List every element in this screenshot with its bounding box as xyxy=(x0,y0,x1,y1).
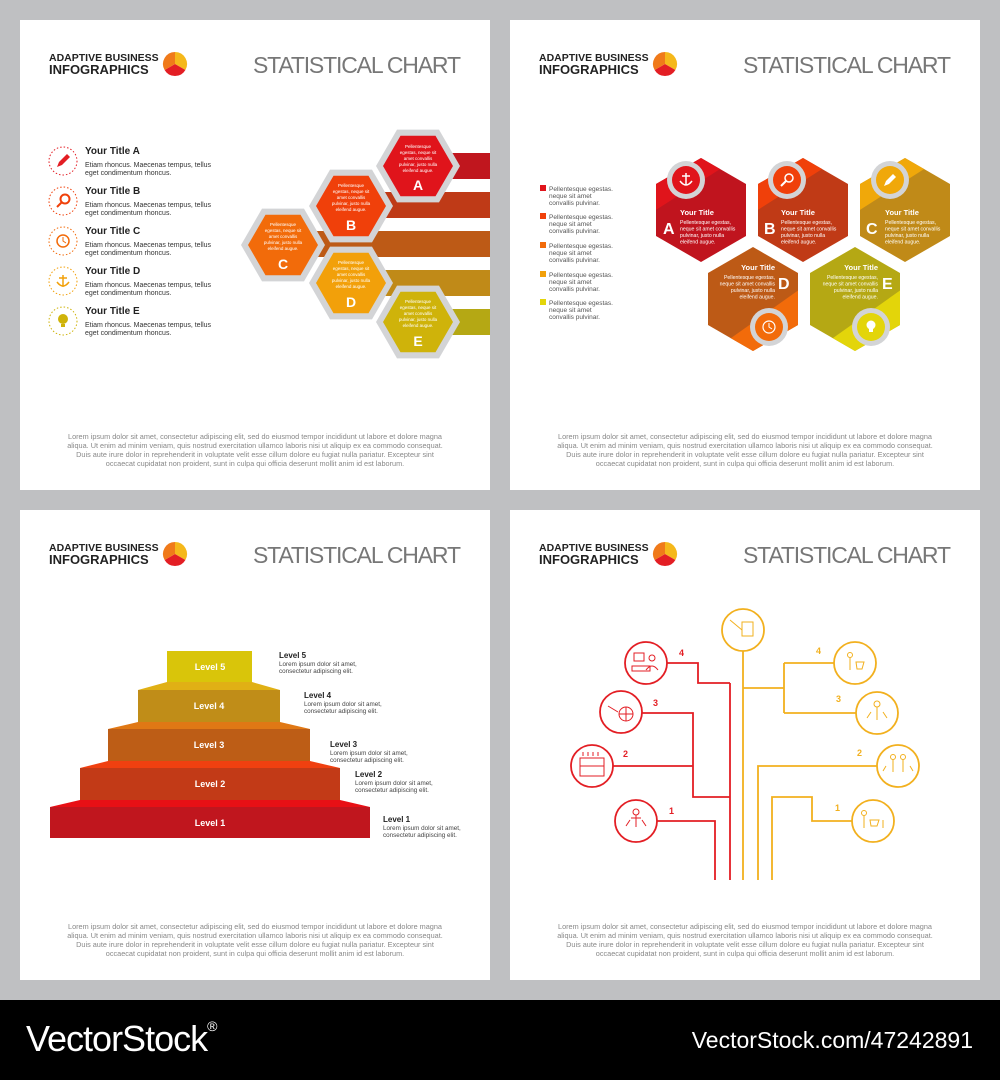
legend: neque sit amet xyxy=(549,279,592,286)
legend: convallis pulvinar. xyxy=(549,286,600,293)
hexagons A-E: eleifend augue. xyxy=(336,284,366,289)
hexagons A-E: C xyxy=(278,256,288,272)
red numbers: 2 xyxy=(623,749,628,759)
image id: VectorStock.com/47242891 xyxy=(692,1027,973,1053)
level labels xyxy=(279,651,461,839)
level labels: Level 2 xyxy=(355,770,383,779)
hexagons: E xyxy=(882,276,893,293)
level labels: Level 3 xyxy=(330,740,358,749)
level labels: Level 4 xyxy=(304,691,332,700)
legend: Pellentesque egestas. xyxy=(549,272,613,279)
footer text: Lorem ipsum dolor sit amet, consectetur adipiscing elit, sed do eiusmod tempor incididunt ut labore et dolore magna xyxy=(558,922,933,931)
footer text: aliqua. Ut enim ad minim veniam, quis nostrud exercitation ullamco laboris nisi ut aliquip ex ea commodo consequat. xyxy=(67,441,443,450)
legend: convallis pulvinar. xyxy=(549,228,600,235)
hexagons A-E: egestas, neque sit xyxy=(333,189,370,194)
hexagons: pulvinar, justo nulla xyxy=(834,288,878,294)
pyramid: Level 2 xyxy=(195,779,225,789)
hexagons: neque sit amet convallis xyxy=(885,226,941,232)
header: ADAPTIVE BUSINESS xyxy=(49,542,159,554)
legend: Pellentesque egestas. xyxy=(549,214,613,221)
hexagons: Pellentesque egestas, xyxy=(724,275,775,281)
level labels: Lorem ipsum dolor sit amet, xyxy=(330,750,408,757)
hexagons: Your Title xyxy=(844,263,878,272)
hexagons A-E: eleifend augue. xyxy=(336,207,366,212)
legend: neque sit amet xyxy=(549,250,592,257)
footer text: occaecat cupidatat non proident, sunt in culpa qui officia deserunt mollit anim id est laborum. xyxy=(596,949,894,958)
header: ADAPTIVE BUSINESS xyxy=(49,52,159,64)
legend: Pellentesque egestas. xyxy=(549,243,613,250)
header: ADAPTIVE BUSINESS xyxy=(539,542,649,554)
level labels: Lorem ipsum dolor sit amet, xyxy=(304,701,382,708)
hexagons A-E: amet convallis xyxy=(337,272,366,277)
legend xyxy=(540,185,613,321)
hexagons A-E: egestas, neque sit xyxy=(333,266,370,271)
hexagons A-E: Pellentesque xyxy=(338,260,365,265)
level labels: consectetur adipiscing elit. xyxy=(355,787,429,794)
hexagons: eleifend augue. xyxy=(781,240,816,246)
header: INFOGRAPHICS xyxy=(539,552,639,567)
hexagons A-E: amet convallis xyxy=(269,234,298,239)
bars xyxy=(283,153,490,335)
hexagons: eleifend augue. xyxy=(843,294,878,300)
footer text xyxy=(557,432,933,468)
hexagons A-E: pulvinar, justo nulla xyxy=(332,201,371,206)
hexagons A-E: pulvinar, justo nulla xyxy=(399,317,438,322)
hexagons A-E: pulvinar, justo nulla xyxy=(399,162,438,167)
level labels: Level 1 xyxy=(383,815,411,824)
list items: Etiam rhoncus. Maecenas tempus, tellus xyxy=(85,322,212,329)
footer text xyxy=(557,922,933,958)
footer text: Duis aute irure dolor in reprehenderit in voluptate velit esse cillum dolore eu fugiat nulla pariatur. Excepteur sint xyxy=(76,940,434,949)
list items: Your Title B xyxy=(85,186,140,197)
legend: convallis pulvinar. xyxy=(549,200,600,207)
header xyxy=(49,542,461,568)
footer text: Duis aute irure dolor in reprehenderit in voluptate velit esse cillum dolore eu fugiat nulla pariatur. Excepteur sint xyxy=(566,450,924,459)
panel: tree diagram xyxy=(510,510,980,980)
hexagons: Pellentesque egestas, xyxy=(827,275,878,281)
hexagons A-E: amet convallis xyxy=(404,156,433,161)
level labels: consectetur adipiscing elit. xyxy=(279,668,353,675)
footer text: Duis aute irure dolor in reprehenderit in voluptate velit esse cillum dolore eu fugiat nulla pariatur. Excepteur sint xyxy=(566,940,924,949)
hexagons A-E: pulvinar, justo nulla xyxy=(264,240,303,245)
red numbers xyxy=(623,648,684,816)
hexagons: eleifend augue. xyxy=(740,294,775,300)
list items: Your Title C xyxy=(85,226,140,237)
hexagons A-E: E xyxy=(413,333,423,349)
header: STATISTICAL CHART xyxy=(253,52,461,78)
header xyxy=(539,542,951,568)
hexagons: pulvinar, justo nulla xyxy=(680,233,724,239)
hexagons A-E: A xyxy=(413,177,423,193)
list items: eget condimentum rhoncus. xyxy=(85,250,171,257)
footer text: Lorem ipsum dolor sit amet, consectetur adipiscing elit, sed do eiusmod tempor incididunt ut labore et dolore magna xyxy=(558,432,933,441)
pyramid: Level 1 xyxy=(195,818,225,828)
hexagons A-E: B xyxy=(346,217,356,233)
hexagons: A xyxy=(663,221,675,238)
header: STATISTICAL CHART xyxy=(743,542,951,568)
footer text: occaecat cupidatat non proident, sunt in culpa qui officia deserunt mollit anim id est laborum. xyxy=(106,949,404,958)
hexagons: pulvinar, justo nulla xyxy=(885,233,929,239)
hexagons A-E: pulvinar, justo nulla xyxy=(332,278,371,283)
hexagons: pulvinar, justo nulla xyxy=(731,288,775,294)
hexagons: neque sit amet convallis xyxy=(720,282,775,288)
list items: Etiam rhoncus. Maecenas tempus, tellus xyxy=(85,202,212,209)
list items: Your Title A xyxy=(85,146,140,157)
hexagons A-E: Pellentesque xyxy=(270,222,297,227)
brand name: VectorStock® xyxy=(26,1018,216,1059)
level labels: Lorem ipsum dolor sit amet, xyxy=(279,661,357,668)
hexagons: Pellentesque egestas, xyxy=(885,220,936,226)
hexagons: pulvinar, justo nulla xyxy=(781,233,825,239)
list items: eget condimentum rhoncus. xyxy=(85,210,171,217)
pyramid: Level 3 xyxy=(194,740,224,750)
list items: Your Title E xyxy=(85,306,140,317)
legend: Pellentesque egestas. xyxy=(549,300,613,307)
footer text: aliqua. Ut enim ad minim veniam, quis nostrud exercitation ullamco laboris nisi ut aliquip ex ea commodo consequat. xyxy=(557,931,933,940)
hexagons: Pellentesque egestas, xyxy=(781,220,832,226)
yellow numbers: 1 xyxy=(835,803,840,813)
hexagons: eleifend augue. xyxy=(885,240,920,246)
hexagons A-E: D xyxy=(346,294,356,310)
hexagons: eleifend augue. xyxy=(680,240,715,246)
red numbers: 4 xyxy=(679,648,684,658)
red numbers: 3 xyxy=(653,698,658,708)
footer text: Lorem ipsum dolor sit amet, consectetur adipiscing elit, sed do eiusmod tempor incididunt ut labore et dolore magna xyxy=(68,432,443,441)
legend: convallis pulvinar. xyxy=(549,257,600,264)
hexagons: C xyxy=(866,221,878,238)
list items: Etiam rhoncus. Maecenas tempus, tellus xyxy=(85,242,212,249)
yellow numbers xyxy=(816,646,862,813)
header: INFOGRAPHICS xyxy=(49,552,149,567)
red branches xyxy=(571,642,730,880)
list items: eget condimentum rhoncus. xyxy=(85,330,171,337)
header: STATISTICAL CHART xyxy=(253,542,461,568)
hexagons xyxy=(656,158,950,351)
hexagons: B xyxy=(764,221,776,238)
hexagons A-E: egestas, neque sit xyxy=(400,150,437,155)
hexagons A-E: egestas, neque sit xyxy=(400,305,437,310)
panel: honeycomb chart xyxy=(510,20,980,490)
header xyxy=(49,52,461,78)
header xyxy=(539,52,951,78)
yellow numbers: 4 xyxy=(816,646,821,656)
yellow numbers: 2 xyxy=(857,748,862,758)
footer text: occaecat cupidatat non proident, sunt in culpa qui officia deserunt mollit anim id est laborum. xyxy=(596,459,894,468)
pyramid: Level 4 xyxy=(194,701,224,711)
list items: Etiam rhoncus. Maecenas tempus, tellus xyxy=(85,162,212,169)
panel: pyramid levels xyxy=(20,510,490,980)
pyramid xyxy=(50,651,370,838)
hexagons: Pellentesque egestas, xyxy=(680,220,731,226)
header: STATISTICAL CHART xyxy=(743,52,951,78)
hexagons A-E: amet convallis xyxy=(337,195,366,200)
pyramid: Level 5 xyxy=(195,662,225,672)
watermark bar xyxy=(0,1000,1000,1080)
legend: neque sit amet xyxy=(549,221,592,228)
panel: hexagon list chart xyxy=(20,20,490,490)
yellow branches xyxy=(722,609,919,880)
hexagons A-E: egestas, neque sit xyxy=(265,228,302,233)
hexagons: Your Title xyxy=(885,208,919,217)
hexagons: Your Title xyxy=(680,208,714,217)
list items: eget condimentum rhoncus. xyxy=(85,170,171,177)
red numbers: 1 xyxy=(669,806,674,816)
legend: convallis pulvinar. xyxy=(549,314,600,321)
hexagons: neque sit amet convallis xyxy=(680,226,736,232)
footer text: aliqua. Ut enim ad minim veniam, quis nostrud exercitation ullamco laboris nisi ut aliquip ex ea commodo consequat. xyxy=(67,931,443,940)
level labels: Level 5 xyxy=(279,651,307,660)
hexagons A-E: Pellentesque xyxy=(338,183,365,188)
hexagons A-E: Pellentesque xyxy=(405,144,432,149)
list items: eget condimentum rhoncus. xyxy=(85,290,171,297)
footer text xyxy=(67,922,443,958)
hexagons: neque sit amet convallis xyxy=(781,226,837,232)
level labels: consectetur adipiscing elit. xyxy=(330,757,404,764)
hexagons A-E: Pellentesque xyxy=(405,299,432,304)
hexagons A-E xyxy=(241,130,460,358)
header: ADAPTIVE BUSINESS xyxy=(539,52,649,64)
list items xyxy=(49,146,212,337)
list items: Your Title D xyxy=(85,266,140,277)
legend: Pellentesque egestas. xyxy=(549,186,613,193)
hexagons A-E: eleifend augue. xyxy=(403,323,433,328)
level labels: consectetur adipiscing elit. xyxy=(383,832,457,839)
level labels: consectetur adipiscing elit. xyxy=(304,708,378,715)
footer text: Duis aute irure dolor in reprehenderit in voluptate velit esse cillum dolore eu fugiat nulla pariatur. Excepteur sint xyxy=(76,450,434,459)
footer text: Lorem ipsum dolor sit amet, consectetur adipiscing elit, sed do eiusmod tempor incididunt ut labore et dolore magna xyxy=(68,922,443,931)
footer text: occaecat cupidatat non proident, sunt in culpa qui officia deserunt mollit anim id est laborum. xyxy=(106,459,404,468)
hexagons A-E: amet convallis xyxy=(404,311,433,316)
header: INFOGRAPHICS xyxy=(539,62,639,77)
hexagons: Your Title xyxy=(741,263,775,272)
list items: Etiam rhoncus. Maecenas tempus, tellus xyxy=(85,282,212,289)
legend: neque sit amet xyxy=(549,307,592,314)
hexagons: neque sit amet convallis xyxy=(823,282,878,288)
hexagons: D xyxy=(778,276,790,293)
level labels: Lorem ipsum dolor sit amet, xyxy=(355,780,433,787)
level labels: Lorem ipsum dolor sit amet, xyxy=(383,825,461,832)
footer text xyxy=(67,432,443,468)
hexagons: Your Title xyxy=(781,208,815,217)
footer text: aliqua. Ut enim ad minim veniam, quis nostrud exercitation ullamco laboris nisi ut aliquip ex ea commodo consequat. xyxy=(557,441,933,450)
hexagons A-E: eleifend augue. xyxy=(268,246,298,251)
yellow numbers: 3 xyxy=(836,694,841,704)
hexagons A-E: eleifend augue. xyxy=(403,168,433,173)
header: INFOGRAPHICS xyxy=(49,62,149,77)
legend: neque sit amet xyxy=(549,193,592,200)
